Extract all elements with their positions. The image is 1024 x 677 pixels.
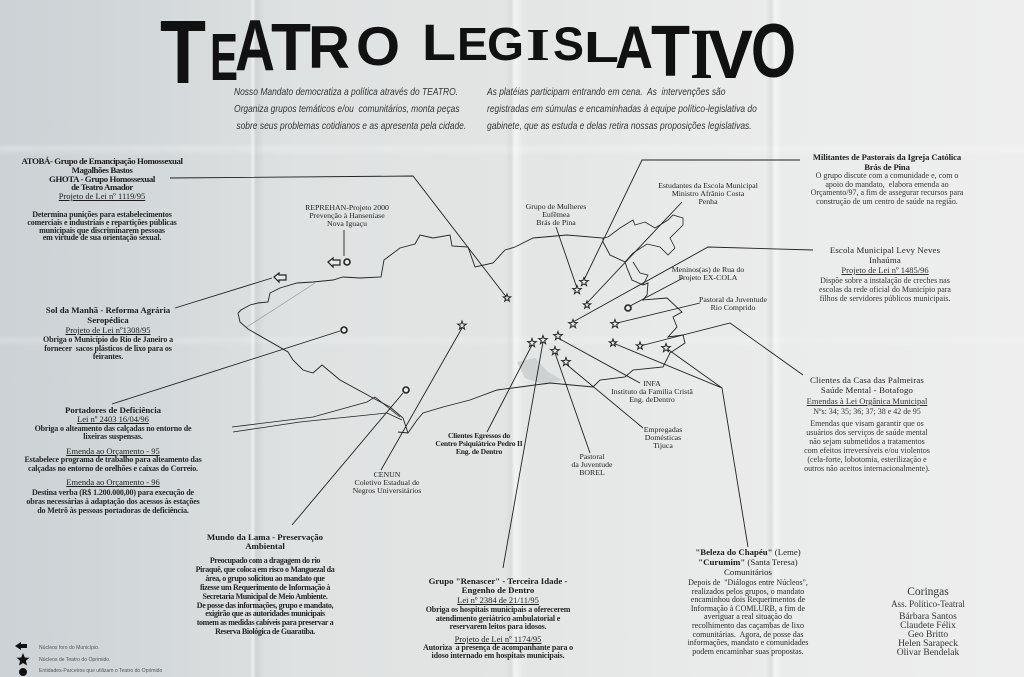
- title: A: [235, 6, 275, 86]
- panel: Portadores de Deficiência: calçadas no entorno de orelhões e caixas do Correio.: [28, 464, 198, 473]
- title: T: [651, 12, 690, 90]
- panel: Escola Municipal Levy Neves: escolas da rede oficial do Município para: [819, 285, 951, 294]
- panel: Mundo da Lama: Piraquê, que coloca em risco o Manguezal da: [196, 565, 334, 574]
- panel: Portadores de Deficiência: Destina verba (R$ 1.200.000,00) para execução de: [32, 488, 194, 497]
- panel: Coringas: Olivar Bendelak: [897, 648, 959, 658]
- map label: Clientes Egressos: [435, 431, 523, 456]
- panel: Beleza do Chapéu / Curumim: averiguar a real situação do: [704, 612, 792, 621]
- panel: Beleza do Chapéu / Curumim: Informação à COMLURB, a fim de: [691, 604, 805, 613]
- panel: Sol da Manhã: Projeto de Lei nº1308/95: [65, 325, 151, 335]
- map label: Reprehan: Prevenção à Hanseníase: [309, 211, 385, 220]
- map label: Pastoral Borel: Pastoral: [579, 452, 605, 461]
- title: G: [487, 18, 524, 70]
- title: A: [615, 14, 653, 81]
- panel: Beleza do Chapéu / Curumim: "Curumim" (Santa Teresa): [698, 557, 798, 567]
- map label: INFA: Instituto da Família Cristã: [611, 387, 693, 396]
- leader: Mundo da Lama: [292, 393, 403, 525]
- panel: Coringas: Helen Sarapeck: [898, 639, 958, 649]
- map label: Pastoral Rio Comprido: Pastoral da Juventude: [699, 295, 767, 304]
- map label: Grupo de Mulheres: Grupo de Mulheres: [526, 202, 586, 211]
- panel: Sol da Manhã: [43, 305, 173, 361]
- panel: Militantes de Pastorais: [811, 152, 964, 206]
- panel: Portadores de Deficiência: Emenda ao Orçamento - 96: [66, 477, 160, 487]
- panel: Escola Municipal Levy Neves: Projeto de Lei nº 1485/96: [841, 265, 929, 275]
- panel: Escola Municipal Levy Neves: Escola Municipal Levy Neves: [830, 245, 940, 255]
- panel: Clientes da Casa das Palmeiras: Clientes da Casa das Palmeiras: [810, 375, 924, 385]
- panel: Grupo Renascer: Grupo "Renascer" - Terceira Idade -: [429, 576, 567, 586]
- leader: Renascer: [503, 342, 543, 568]
- leader: Militantes: [584, 160, 800, 280]
- panel: Atobá / Ghota: Projeto de Lei nº 1119/95: [59, 191, 145, 201]
- panel: Grupo Renascer: Obriga os hospitais municipais a oferecerem: [426, 605, 570, 614]
- legend text: [39, 645, 162, 674]
- panel: Mundo da Lama: tomem as medidas cabíveis para preservar a: [197, 618, 333, 627]
- panel: Beleza do Chapéu / Curumim: recolhimento das caçambas de lixo: [692, 621, 804, 630]
- panel: Sol da Manhã: feirantes.: [93, 352, 123, 361]
- map label: Estudantes: Penha: [698, 197, 718, 206]
- panel: Escola Municipal Levy Neves: [819, 245, 951, 303]
- leader: Portadores: [112, 331, 340, 404]
- panel: Beleza do Chapéu / Curumim: podem encaminhar suas propostas.: [692, 647, 804, 656]
- panel: Atobá / Ghota: Magalhões Bastos: [72, 165, 132, 175]
- title: R: [308, 14, 350, 81]
- panel: Beleza do Chapéu / Curumim: informações, mandato e comunidades: [688, 638, 808, 647]
- panel: Beleza do Chapéu / Curumim: comunitárias. Agora, de posse das: [693, 630, 803, 639]
- panel: Portadores de Deficiência: [24, 405, 202, 515]
- panel: Mundo da Lama: fizesse um Requerimento de Informação à: [200, 583, 330, 592]
- map label: Empregadas Domésticas: Tijuca: [653, 441, 673, 450]
- map label: CENUN: Coletivo Estadual de: [355, 478, 419, 487]
- panel: Atobá / Ghota: municipais que discriminarem pessoas: [39, 226, 165, 234]
- panel: Clientes da Casa das Palmeiras: não sejam submetidos a tratamentos: [809, 436, 925, 446]
- panel: Atobá / Ghota: em virtude de sua orientação sexual.: [43, 233, 161, 242]
- panel: Grupo Renascer: Projeto de Lei nº 1174/95: [455, 634, 541, 644]
- legend text: Núcleos foro do Município.: [39, 645, 99, 651]
- panel: Mundo da Lama: Preocupado com a dragagem do rio: [210, 556, 320, 565]
- panel: Sol da Manhã: Obriga o Município do Rio de Janeiro a: [43, 335, 173, 344]
- map label: INFA: [611, 379, 693, 404]
- map label: INFA: Eng. deDentro: [629, 395, 675, 404]
- intro text left: Organiza grupos temáticos e/ou comunitários, monta peças: [234, 104, 460, 115]
- leader: Meninos: [630, 278, 683, 306]
- panel: Coringas: [891, 586, 965, 658]
- panel: Coringas: Coringas: [907, 586, 949, 598]
- map label: Grupo de Mulheres: Eufêmea: [542, 210, 570, 219]
- panel: Portadores de Deficiência: do Metrô às pessoas portadoras de deficiência.: [37, 506, 189, 515]
- intro text right: gabinete, que as estuda e delas retira nossas proposições legislativas.: [487, 121, 752, 132]
- leader: Escola Levy: [573, 247, 813, 322]
- leader: Empregadas: [566, 364, 643, 428]
- panel: Mundo da Lama: exigirão que as autoridades municipais: [205, 609, 325, 618]
- panel: Clientes da Casa das Palmeiras: [804, 375, 930, 473]
- map label: Reprehan: REPREHAN-Projeto 2000: [305, 203, 389, 212]
- panel: Portadores de Deficiência: lixeiras suspensas.: [83, 432, 143, 441]
- leader: INFA: [558, 338, 640, 383]
- circle markers: [341, 259, 631, 393]
- panel: Beleza do Chapéu / Curumim: "Beleza do Chapéu" (Leme): [695, 547, 801, 557]
- map label: Reprehan: [305, 203, 389, 228]
- panel: Atobá / Ghota: [21, 156, 183, 242]
- intro text right: [486, 87, 757, 132]
- intro text left: Nosso Mandato democratiza a política através do TEATRO.: [234, 87, 458, 98]
- panel: Portadores de Deficiência: Obriga o alteamento das calçadas no entorno de: [35, 424, 191, 432]
- panel: Coringas: Ass. Político-Teatral: [891, 599, 965, 609]
- panel: Militantes de Pastorais: O grupo discute com a comunidade e, com o: [816, 171, 958, 180]
- panel: Mundo da Lama: Mundo da Lama - Preservação: [207, 532, 323, 542]
- panel: Escola Municipal Levy Neves: Inhaúma: [869, 254, 901, 264]
- panel: Clientes da Casa das Palmeiras: usuários dos serviços de saúde mental: [806, 428, 928, 436]
- leader: Grupo de Mulheres: [556, 227, 577, 288]
- map label: INFA: INFA: [643, 379, 661, 388]
- panel: Militantes de Pastorais: Orçamento/97, a fim de assegurar recursos para: [811, 188, 963, 197]
- map label: Pastoral Borel: BOREL: [579, 468, 605, 477]
- panel: Clientes da Casa das Palmeiras: (cela-forte, lobotomia, esterilização e: [807, 454, 927, 464]
- panel: Beleza do Chapéu / Curumim: realizados pelos grupos, o mandato: [692, 587, 804, 596]
- title: L: [584, 23, 619, 72]
- map label: CENUN: Negros Universitários: [353, 486, 421, 495]
- panel: Coringas: Geo Britto: [908, 630, 948, 640]
- panel: Atobá / Ghota: Determina punições para estabelecimentos: [32, 210, 172, 219]
- map label: Grupo de Mulheres: Brás de Pina: [536, 218, 576, 227]
- panel: Clientes da Casa das Palmeiras: outros não aceitos internacionalmente).: [804, 464, 930, 472]
- arrows outside the municipality: [274, 258, 340, 282]
- panel: Coringas: Bárbara Santos: [899, 612, 957, 622]
- panel: Atobá / Ghota: GHOTA - Grupo Homossexual: [49, 174, 155, 184]
- map label: Empregadas Domésticas: Empregadas: [644, 425, 682, 434]
- panel: Grupo Renascer: atendimento geriátrico ambulatorial e: [436, 614, 560, 623]
- panel: Mundo da Lama: Reserva Biológica de Guaratiba.: [215, 627, 315, 636]
- panel: Militantes de Pastorais: apoio do mandato, elabora emenda ao: [825, 180, 949, 189]
- panel: Beleza do Chapéu / Curumim: Depois de "Diálogos entre Núcleos",: [688, 578, 808, 587]
- panel: Portadores de Deficiência: Emenda ao Orçamento - 95: [66, 446, 160, 456]
- intro text left: [234, 87, 466, 132]
- panel: Militantes de Pastorais: Brás de Pina: [864, 162, 910, 172]
- panel: Atobá / Ghota: comerciais e industriais e repartições públicas: [27, 218, 177, 227]
- panel: Mundo da Lama: De posse das informações, grupo e mandato,: [197, 601, 333, 610]
- panel: Militantes de Pastorais: construção de um centro de saúde na região.: [816, 197, 958, 206]
- panel: Escola Municipal Levy Neves: filhos de servidores públicos municipais.: [820, 294, 950, 303]
- panel: Mundo da Lama: Ambiental: [245, 541, 285, 551]
- west coast: [238, 313, 408, 433]
- panel: Beleza do Chapéu / Curumim: Comunitários: [724, 567, 772, 577]
- panel: Beleza do Chapéu / Curumim: [688, 547, 808, 656]
- panel: Escola Municipal Levy Neves: Dispõe sobre a instalação de creches nas: [820, 276, 950, 285]
- leader: Casa das Palmeiras: [640, 323, 803, 375]
- leader: Clientes Egressos: [487, 345, 532, 432]
- panel: Grupo Renascer: reservarem leitos para idosos.: [450, 622, 546, 631]
- map label: CENUN: CENUN: [374, 470, 400, 479]
- panel: Clientes da Casa das Palmeiras: Saúde Mental - Botafogo: [821, 384, 913, 394]
- legend text: Entidades-Parceiros que utilizam o Teatro do Oprimido: [39, 668, 162, 674]
- legend: [15, 642, 162, 676]
- panel: Grupo Renascer: Lei nº 2384 de 21/11/95: [457, 595, 539, 605]
- panel: Clientes da Casa das Palmeiras: Emendas à Lei Orgânica Municipal: [807, 396, 927, 406]
- map label: Empregadas Domésticas: Domésticas: [645, 433, 681, 442]
- title: I: [526, 19, 550, 70]
- leader: Pastoral Borel: [555, 353, 590, 453]
- panel: Grupo Renascer: [423, 576, 573, 660]
- leader: Pastoral Rio Comprido: [617, 303, 700, 323]
- panel: Mundo da Lama: [196, 532, 335, 636]
- Marambaia: [232, 397, 402, 432]
- panel: Portadores de Deficiência: Portadores de Deficiência: [65, 405, 161, 415]
- title: L: [422, 14, 456, 71]
- panel: Beleza do Chapéu / Curumim: encaminhou dois Requerimentos de: [691, 595, 805, 604]
- map label: Meninos de Rua: Meninos(as) de Rua do: [672, 265, 744, 274]
- intro text right: As platéias participam entrando em cena. As intervenções são: [487, 87, 725, 98]
- title: [160, 3, 796, 90]
- leader: Estudantes: [587, 202, 682, 303]
- map label: Pastoral Rio Comprido: [699, 295, 767, 312]
- map label: Clientes Egressos: Centro Psiquiátrico Pedro II: [435, 439, 523, 448]
- panel: Grupo Renascer: idoso internado em hospitais municipais.: [432, 651, 564, 660]
- map label: Clientes Egressos: Eng. de Dentro: [456, 447, 502, 456]
- lagoon shading: [517, 358, 562, 385]
- panel: Grupo Renascer: Engenho de Dentro: [462, 585, 534, 595]
- map label: Pastoral Borel: [572, 452, 612, 477]
- intro text left: sobre seus problemas cotidianos e as apresenta pela cidade.: [236, 121, 466, 132]
- map label: Reprehan: Nova Iguaçu: [327, 219, 367, 228]
- panel: Mundo da Lama: Secretaria Municipal de Meio Ambiente.: [202, 592, 327, 601]
- title: E: [457, 18, 488, 70]
- panel: Grupo Renascer: Autoriza a presença de acompanhante para o: [423, 643, 573, 652]
- panel: Sol da Manhã: Seropédica: [87, 315, 129, 325]
- title: S: [553, 17, 584, 70]
- map label: Meninos de Rua: [672, 265, 744, 282]
- panel: Mundo da Lama: área, o grupo solicitou ao mandato que: [205, 574, 325, 583]
- bay outline: [603, 215, 683, 285]
- panel: Portadores de Deficiência: Lei nº 2403 16/04/96: [77, 414, 149, 424]
- panel: Sol da Manhã: fornecer sacos plásticos de lixo para os: [44, 344, 172, 353]
- panel: Portadores de Deficiência: obras necessárias à adaptação dos acessos às estações: [26, 497, 200, 506]
- map label: Meninos de Rua: Projeto EX-COLA: [679, 273, 737, 282]
- title: T: [271, 10, 311, 85]
- map label: Empregadas Domésticas: [644, 425, 682, 450]
- map label: Grupo de Mulheres: [526, 202, 586, 227]
- map label: Estudantes: Estudantes da Escola Municipal: [658, 181, 758, 190]
- coastline north boundary: [238, 235, 685, 433]
- panel: Clientes da Casa das Palmeiras: com efeitos irreversíveis e/ou violentos: [804, 446, 930, 454]
- map label: Clientes Egressos: Clientes Egressos do: [448, 431, 510, 440]
- panel: Coringas: Claudete Félix: [900, 621, 956, 631]
- legend icons: [15, 642, 30, 676]
- map label: Estudantes: [658, 181, 758, 206]
- panel: Atobá / Ghota: ATOBÁ- Grupo de Emancipação Homossexual: [21, 156, 182, 166]
- title: O: [356, 15, 400, 77]
- map label: Estudantes: Ministro Afrânio Costa: [672, 189, 744, 198]
- panel: Clientes da Casa das Palmeiras: Nºs: 34; 35; 36; 37; 38 e 42 de 95: [813, 406, 921, 416]
- star markers: [458, 278, 670, 366]
- panel: Clientes da Casa das Palmeiras: Emendas que visam garantir que os: [810, 418, 924, 428]
- leader: Reprehan: [343, 230, 345, 256]
- intro text right: registradas em súmulas e encaminhadas à equipe político-legislativa do: [487, 104, 757, 115]
- panel: Portadores de Deficiência: Estabelece programa de trabalho para alteamento das: [24, 455, 202, 464]
- leader: Sol da Manhã: [175, 278, 272, 308]
- leader: Beleza do Chapéu: [613, 343, 748, 547]
- leader: Atobá: [170, 176, 507, 298]
- panel: Militantes de Pastorais: Militantes de Pastorais da Igreja Católica: [813, 152, 961, 162]
- panel: Sol da Manhã: Sol da Manhã - Reforma Agrária: [46, 305, 170, 315]
- map label: CENUN: [352, 470, 421, 495]
- inland boundary: [247, 283, 315, 327]
- map label: Pastoral Rio Comprido: Rio Comprido: [711, 303, 755, 312]
- legend text: Núcleos de Teatro do Oprimido.: [39, 656, 111, 662]
- map label: Pastoral Borel: da Juventude: [572, 460, 612, 469]
- panel: Atobá / Ghota: de Teatro Amador: [71, 182, 133, 192]
- leader: CENUN: [381, 328, 462, 470]
